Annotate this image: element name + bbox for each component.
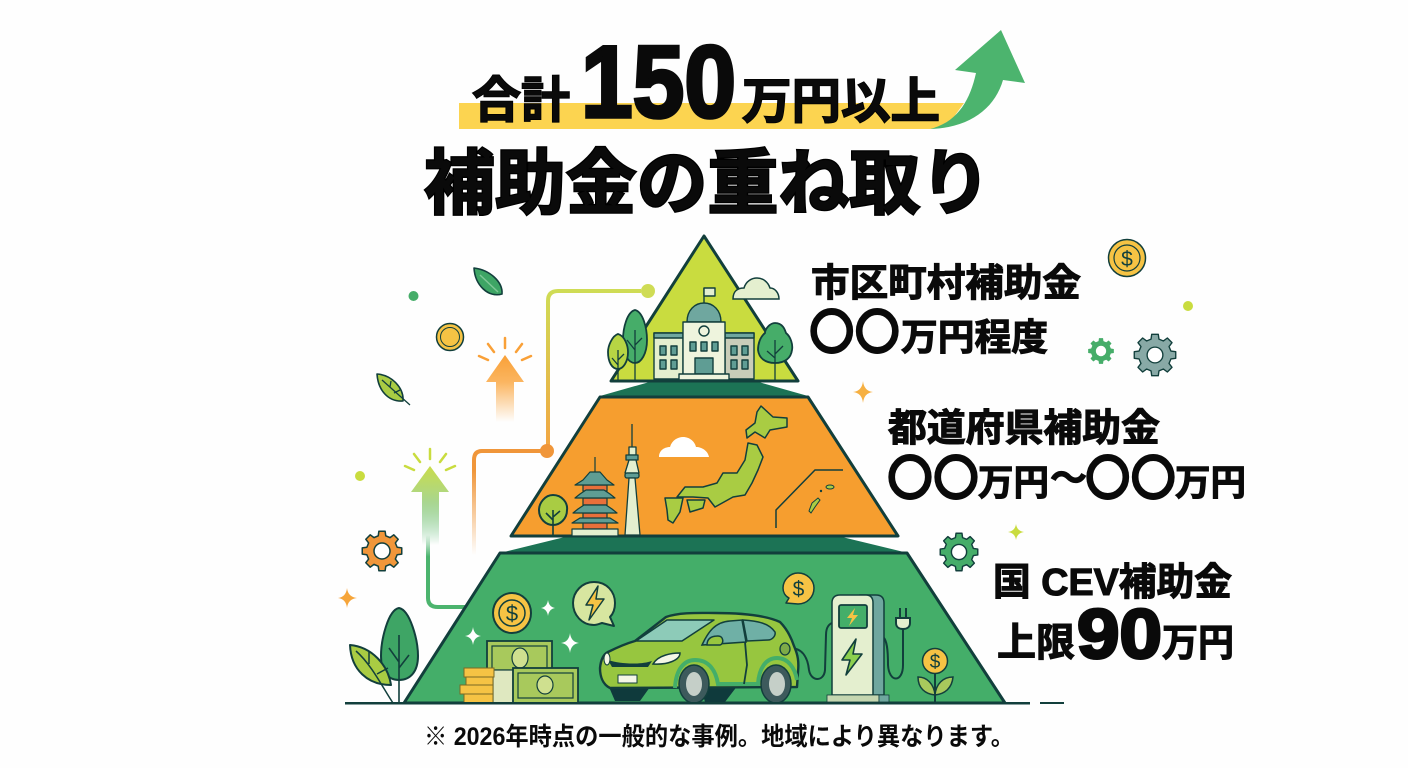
icon: banknotes bbox=[487, 641, 578, 703]
icon: coin flower: $ bbox=[930, 652, 941, 673]
icon: orange sparkle right bbox=[853, 381, 873, 403]
sparkles bbox=[465, 600, 579, 653]
icon: dollar coin top right bbox=[1108, 240, 1146, 276]
label: national subsidy bbox=[993, 562, 1234, 673]
yellow highlight bar bbox=[459, 103, 964, 129]
label: total: 合計 bbox=[472, 74, 570, 128]
pyramid tier: prefecture bbox=[511, 381, 898, 536]
wheels under body bbox=[606, 680, 655, 701]
license plate bbox=[618, 675, 637, 683]
icon: orange sparkle bbox=[338, 588, 357, 608]
connector: national to arrow bbox=[428, 535, 466, 607]
icon: lightning speech bubble bbox=[573, 582, 615, 626]
windshield bbox=[636, 620, 714, 641]
icon: tower bbox=[625, 424, 640, 535]
icon: lime sparkle right bbox=[1008, 524, 1024, 540]
icon: plain coin bbox=[436, 324, 464, 350]
connector: prefecture to national bbox=[472, 451, 541, 555]
icon: left plants bbox=[350, 608, 418, 703]
rear wheel bbox=[761, 665, 791, 703]
icon: lime leaf bbox=[377, 374, 410, 405]
icon: green gear bbox=[940, 533, 978, 571]
icon: charging station bbox=[827, 595, 889, 702]
label amount: 万円 bbox=[978, 462, 1049, 503]
label heading: 国 CEV補助金 bbox=[993, 562, 1232, 604]
icon: orange rising arrow bbox=[479, 338, 531, 422]
icon: dollar speech bubble: $ bbox=[793, 578, 805, 601]
icon: dollar coin top right: $ bbox=[1121, 248, 1133, 271]
icon: plug bbox=[896, 608, 910, 629]
icon: tree bbox=[539, 495, 567, 535]
charge port bbox=[780, 643, 790, 655]
tier body bbox=[611, 236, 798, 381]
icon: small green gear bbox=[1088, 338, 1114, 364]
map inset: Okinawa bbox=[776, 470, 843, 528]
icon: lime rising arrow bbox=[405, 449, 455, 545]
label amount: 万円 bbox=[1175, 462, 1246, 503]
icon: grey gear bbox=[1134, 334, 1176, 376]
icon: cloud bbox=[733, 278, 779, 299]
headlights bbox=[653, 653, 680, 664]
label heading: 都道府県補助金 bbox=[888, 408, 1160, 450]
tier shoulder bbox=[500, 537, 908, 553]
pyramid tier: municipal bbox=[608, 236, 798, 382]
label amount: 上限 bbox=[997, 622, 1075, 665]
label heading: 市区町村補助金 bbox=[811, 263, 1081, 305]
icon: trees bbox=[608, 310, 792, 381]
mirror bbox=[707, 636, 723, 645]
label amount: 〇〇 bbox=[809, 307, 900, 360]
icon: coin stack bbox=[460, 668, 494, 703]
grille bbox=[608, 660, 652, 667]
front wheel bbox=[679, 665, 709, 703]
icon: electric car bbox=[600, 613, 798, 703]
body bbox=[600, 613, 798, 688]
icon: coin flower bbox=[918, 648, 953, 703]
title: 補助金の重ね取り bbox=[424, 145, 991, 224]
icon: dollar speech bubble bbox=[783, 573, 814, 604]
decorative dot: lime right bbox=[1183, 301, 1193, 311]
tier body bbox=[511, 397, 898, 536]
tier body bbox=[404, 553, 1005, 703]
icon: green leaf top bbox=[474, 268, 502, 295]
label amount bbox=[997, 595, 1234, 673]
label amount: 〇〇 bbox=[887, 453, 979, 506]
icon: map of Japan bbox=[665, 406, 787, 523]
lower trim bbox=[675, 658, 797, 688]
label amount bbox=[887, 453, 1246, 506]
headline: total amount bbox=[459, 25, 1025, 139]
icon: orange gear bbox=[362, 531, 402, 571]
decorative dot: lime bbox=[355, 471, 365, 481]
label amount: 万円程度 bbox=[901, 317, 1048, 358]
label: prefecture subsidy bbox=[887, 408, 1246, 506]
decorative dot: green bbox=[408, 291, 418, 301]
icon: city hall building bbox=[654, 288, 754, 380]
label: municipal subsidy bbox=[809, 263, 1081, 360]
label amount: 万円 bbox=[1162, 623, 1234, 665]
icon: charging cables bbox=[790, 622, 903, 679]
icon: white cloud bbox=[659, 437, 709, 457]
label: over 10k yen: 万円以上 bbox=[742, 75, 940, 129]
label amount: ～ bbox=[1050, 458, 1087, 499]
icon: dollar coin bbox=[493, 593, 531, 633]
side windows bbox=[702, 620, 746, 645]
connector: municipal to prefecture bbox=[540, 284, 655, 458]
number: 150: 150 bbox=[581, 25, 736, 139]
tier base line bbox=[611, 380, 798, 382]
icon: rising green arrow bbox=[930, 30, 1025, 129]
tier shoulder bbox=[600, 381, 808, 396]
pyramid tier: national bbox=[404, 537, 1005, 703]
ground line bbox=[345, 702, 1064, 704]
label amount bbox=[809, 307, 1048, 360]
icon: dollar coin: $ bbox=[506, 601, 518, 626]
icon: pagoda bbox=[572, 457, 618, 536]
footnote: ※ 2026年時点の一般的な事例。地域により異なります。 bbox=[424, 723, 1014, 751]
label amount: 90 bbox=[1077, 595, 1162, 673]
label amount: 〇〇 bbox=[1085, 453, 1176, 506]
door line bbox=[744, 642, 747, 684]
